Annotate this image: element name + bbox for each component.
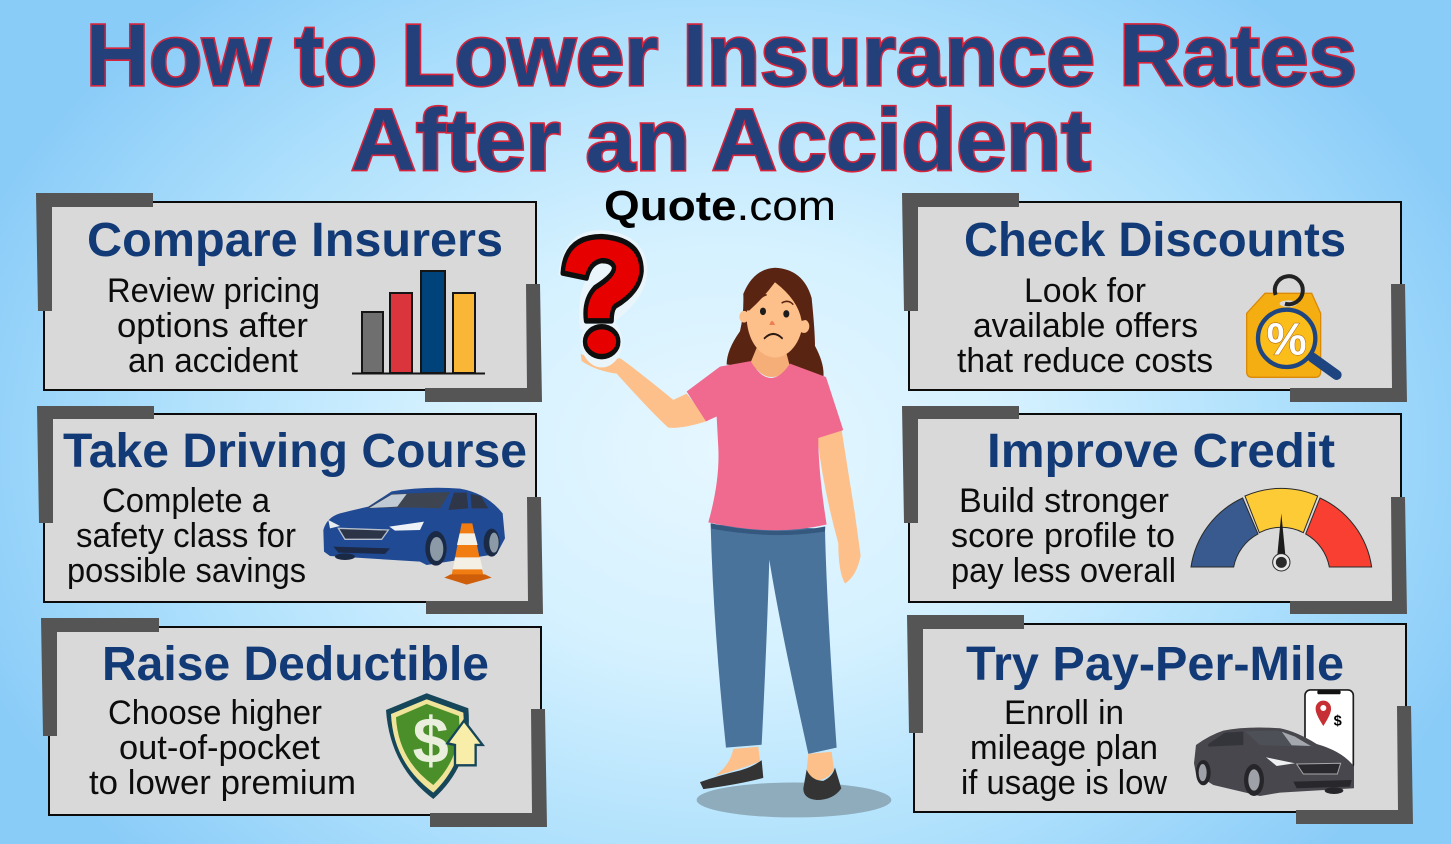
icon: credit score gauge: [1191, 488, 1372, 571]
panel: Raise Deductible: [41, 618, 547, 827]
panel: Check Discounts: [902, 193, 1407, 402]
heading: Try Pay-Per-Mile: [966, 638, 1344, 691]
body text: Look for: [1024, 272, 1146, 310]
logo: Quote.com: Quote .com: [604, 182, 836, 229]
body text: available offers: [973, 307, 1198, 345]
body text: if usage is low: [961, 764, 1167, 802]
body text: safety class for: [76, 517, 296, 555]
body text: [951, 482, 1176, 590]
heading: Take Driving Course: [63, 425, 527, 478]
body text: [957, 272, 1213, 380]
illustration: worried woman holding question mark: [558, 230, 891, 817]
body text: Review pricing: [107, 272, 320, 310]
icon: dollar shield with up arrow: $: [413, 704, 449, 777]
panel: Compare Insurers: [36, 193, 542, 402]
body text: that reduce costs: [957, 342, 1213, 380]
hair, back: [727, 268, 824, 378]
left arm and hand: [581, 354, 708, 428]
ground shadow: [697, 783, 891, 817]
body text: possible savings: [67, 552, 306, 590]
body text: score profile to: [951, 517, 1175, 555]
shirt: [687, 361, 843, 530]
icon: discount tag with magnifier: [1247, 276, 1337, 377]
body text: to lower premium: [89, 764, 356, 802]
legs: [711, 524, 837, 754]
right arm: [817, 430, 861, 583]
heading: Raise Deductible: [102, 638, 489, 691]
neck: [751, 348, 790, 377]
body text: Choose higher: [108, 694, 322, 732]
title: After an Accident: [351, 92, 1091, 189]
ankles: [715, 747, 834, 780]
icon: dollar shield with up arrow: [386, 693, 483, 799]
body text: mileage plan: [970, 729, 1158, 767]
heading: Check Discounts: [964, 214, 1346, 267]
title: [86, 7, 1357, 189]
icon: discount tag with magnifier: %: [1267, 313, 1307, 364]
body text: [67, 482, 306, 590]
icon: blue car with traffic cone: [323, 488, 505, 585]
body text: options after: [117, 307, 308, 345]
heading: Improve Credit: [987, 425, 1335, 478]
body text: an accident: [128, 342, 299, 380]
body text: out-of-pocket: [119, 729, 321, 767]
title: How to Lower Insurance Rates: [86, 7, 1357, 104]
heading: Compare Insurers: [87, 214, 503, 267]
waistband shadow: [711, 523, 825, 535]
panel: Try Pay-Per-Mile: [907, 615, 1413, 824]
face: [739, 269, 811, 357]
body text: Complete a: [102, 482, 270, 520]
icon: phone with location pin and gray car: $: [1334, 713, 1342, 729]
body text: [961, 694, 1167, 802]
panel: Improve Credit: [902, 406, 1407, 614]
icon: phone with location pin and gray car: [1194, 690, 1354, 796]
body text: [107, 272, 320, 380]
body text: Build stronger: [959, 482, 1169, 520]
shoes: [700, 760, 841, 800]
body text: [89, 694, 356, 802]
body text: pay less overall: [951, 552, 1176, 590]
body text: Enroll in: [1004, 694, 1124, 732]
icon: bar chart: [352, 271, 485, 374]
panel: Take Driving Course: [37, 406, 543, 614]
question mark: [558, 230, 647, 367]
